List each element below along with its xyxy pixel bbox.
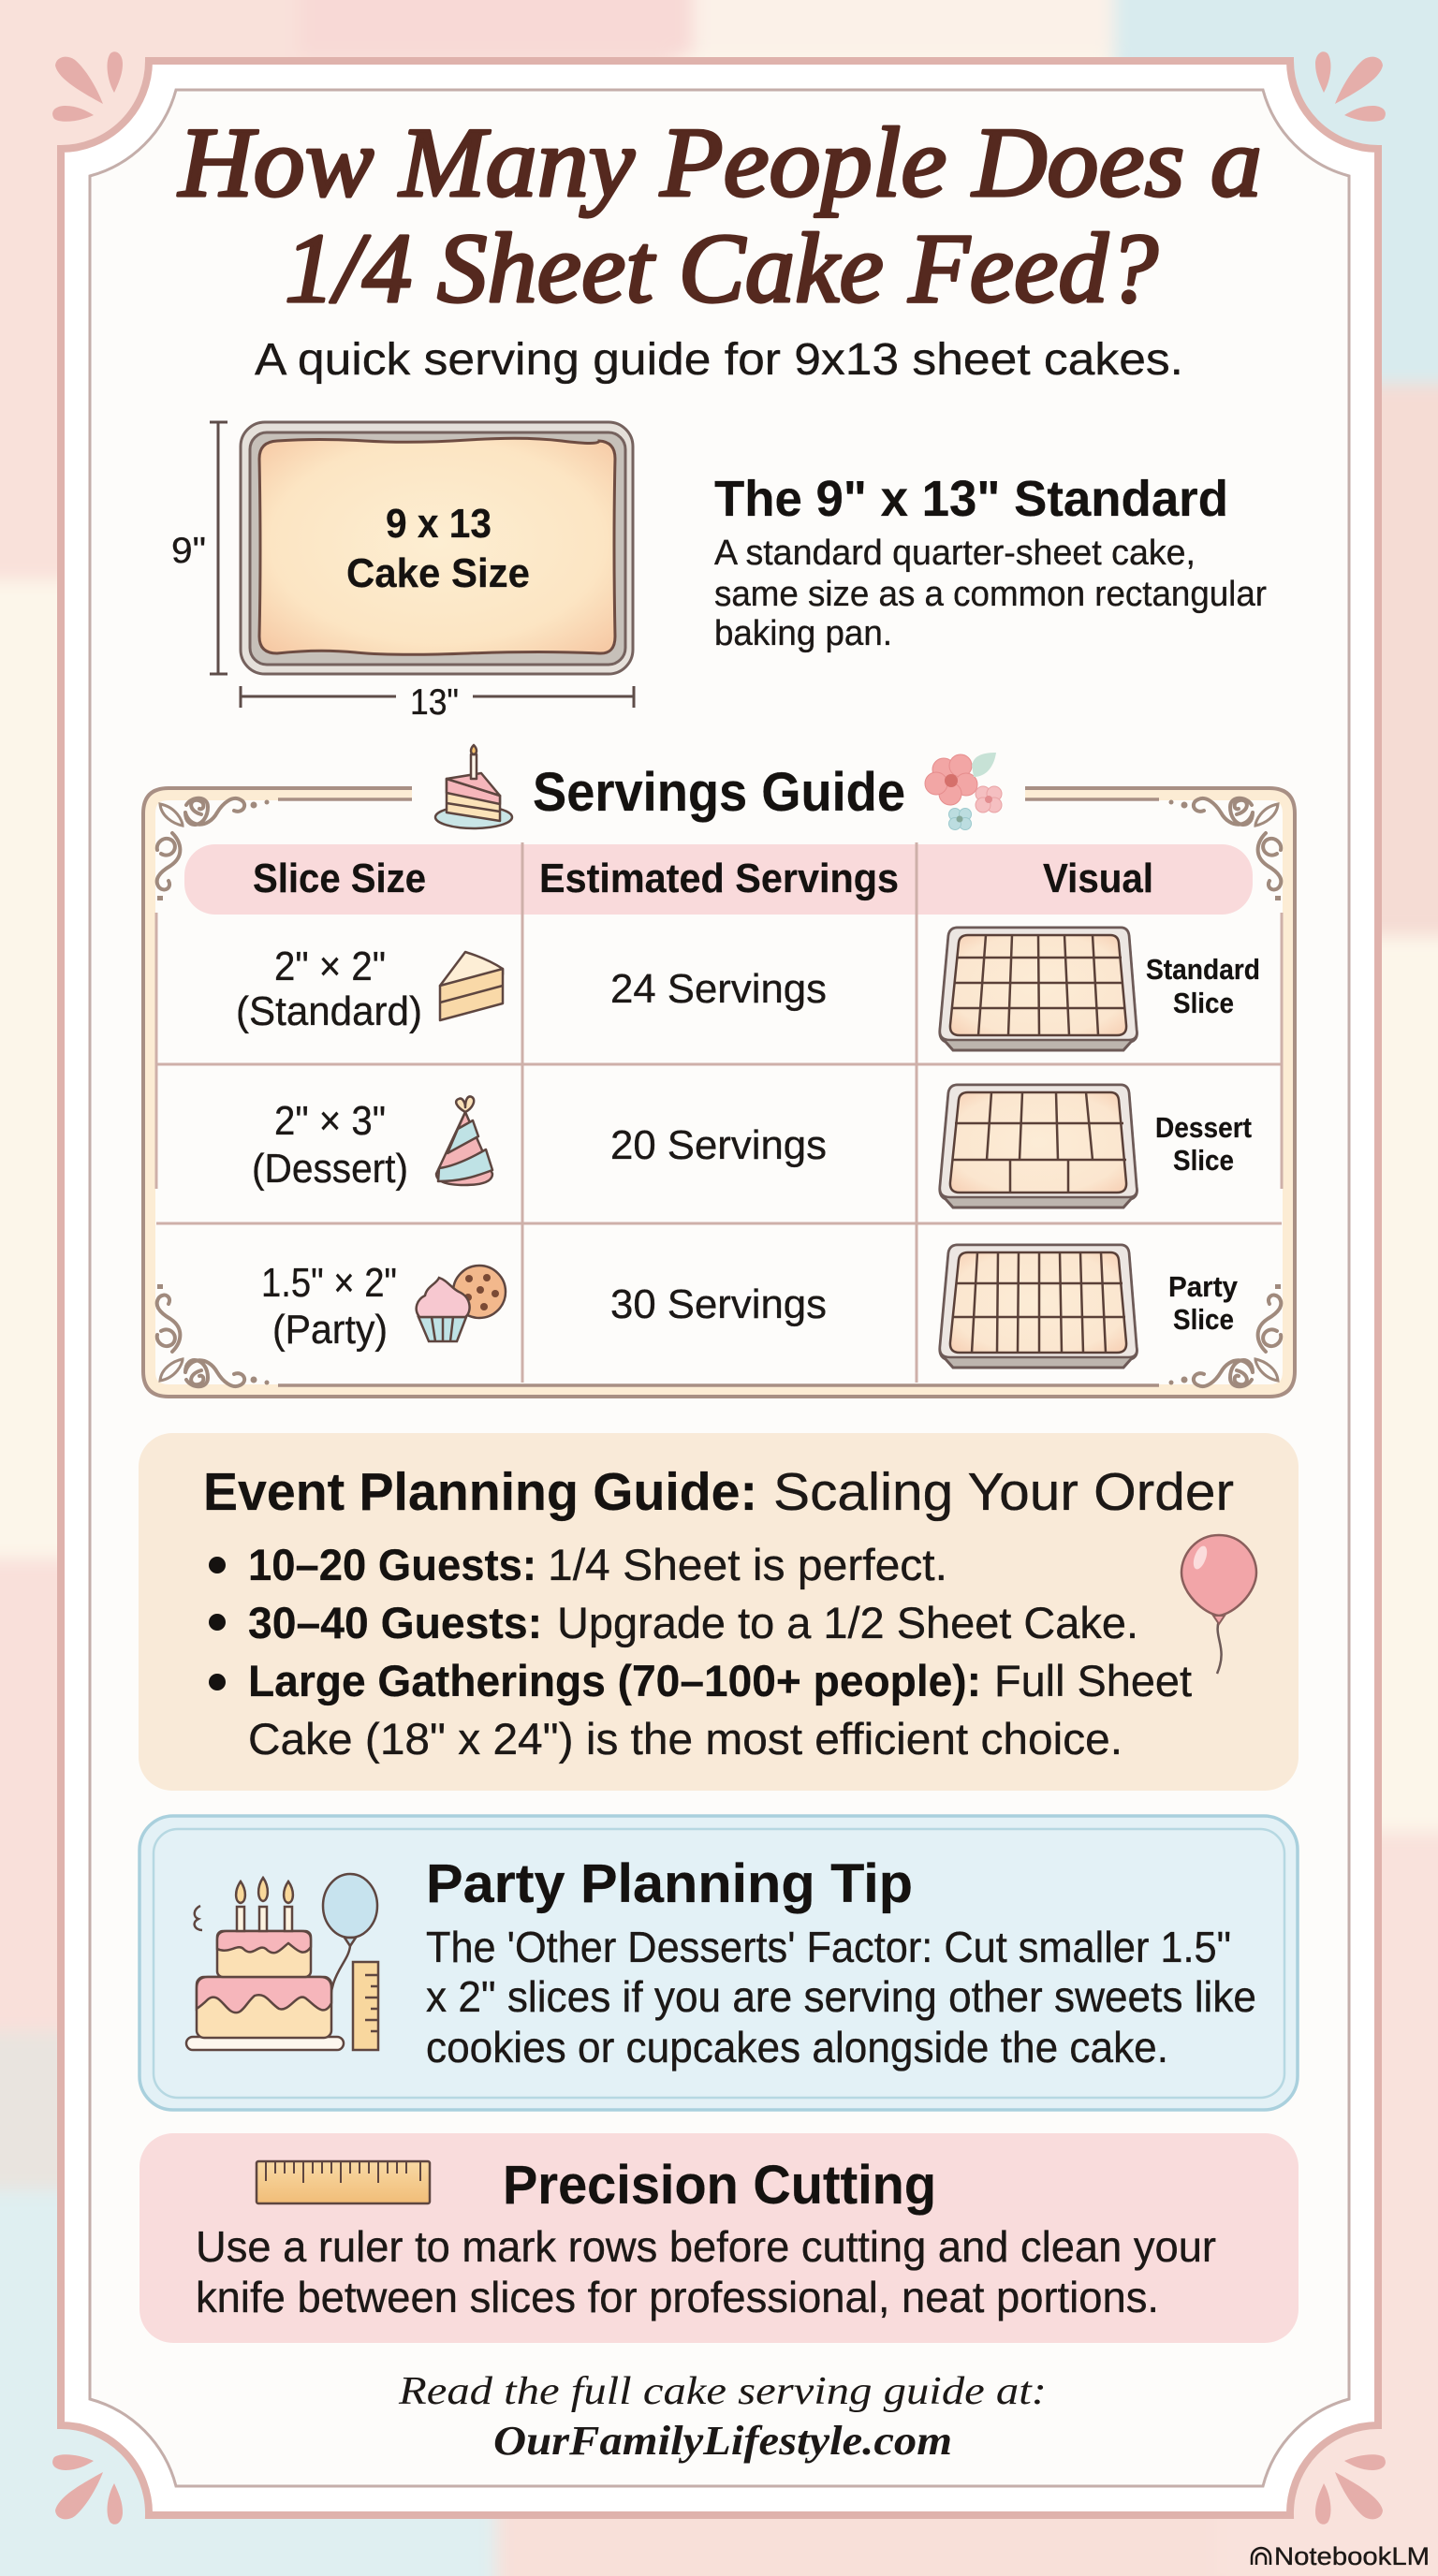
panel: servings guide (143, 745, 1295, 1397)
body text (196, 2222, 1216, 2321)
icon: pink balloon (1181, 1535, 1256, 1674)
body text: The 'Other Desserts' Factor: Cut smaller 1.5" (426, 1923, 1231, 1971)
table grid (156, 842, 1282, 1383)
icon: flowers (925, 753, 1002, 829)
title: How Many People Does a (177, 108, 1262, 217)
slice size: (Dessert) (252, 1146, 408, 1192)
title: 1/4 Sheet Cake Feed? (285, 213, 1158, 323)
table header labels (253, 856, 1153, 901)
bullet list: Cake (18" x 24") is the most efficient choice. (248, 1714, 1123, 1764)
standard description: The 9" x 13" Standard (714, 471, 1228, 527)
row: standard slice (236, 928, 1260, 1050)
standard description: A standard quarter-sheet cake, (714, 534, 1196, 573)
icon: cake slice on plate (435, 745, 512, 828)
servings: 30 Servings (610, 1281, 827, 1327)
slice size (236, 944, 422, 1034)
heading: Servings Guide (533, 762, 905, 823)
footer call to action: Read the full cake serving guide at: (398, 2370, 1047, 2413)
slice size: (Standard) (236, 988, 422, 1034)
slice size: 1.5" × 2" (261, 1260, 397, 1306)
slice size (252, 1098, 408, 1192)
slice size: (Party) (272, 1307, 388, 1353)
pan label (346, 501, 530, 596)
bullet list: Upgrade to a 1/2 Sheet Cake. (557, 1598, 1138, 1647)
heading: Party Planning Tip (426, 1853, 913, 1914)
panel: precision cutting (139, 2133, 1299, 2343)
slice size: 2" × 2" (274, 944, 386, 989)
visual label: Slice (1173, 1303, 1234, 1336)
subtitle: A quick serving guide for 9x13 sheet cakes. (255, 335, 1183, 385)
icon: ruler (257, 2161, 430, 2203)
heading: Scaling Your Order (773, 1462, 1234, 1522)
body text: knife between slices for professional, neat portions. (196, 2273, 1159, 2321)
visual label: Standard (1146, 953, 1260, 986)
visual: 30 slice pan (940, 1245, 1137, 1368)
bullet list: 30–40 Guests: (248, 1598, 542, 1647)
NotebookLM watermark: NotebookLM (1274, 2542, 1430, 2570)
visual label: Party (1168, 1270, 1239, 1303)
heading (203, 1462, 1234, 1522)
icon: birthday cake with balloon and ruler (186, 1874, 378, 2050)
dimension: 9 inch (171, 422, 227, 674)
bullet list (209, 1540, 1192, 1764)
heading: Precision Cutting (503, 2155, 936, 2216)
icon: cake slice (440, 952, 503, 1020)
pan label: Cake Size (346, 550, 530, 596)
heading: Event Planning Guide: (203, 1462, 757, 1522)
visual: 24 slice pan (940, 928, 1137, 1050)
bullet list: 1/4 Sheet is perfect. (548, 1540, 947, 1589)
title (177, 108, 1262, 323)
standard description: baking pan. (714, 614, 892, 653)
dimension: 9 inch: 9" (171, 531, 206, 571)
table header labels: Estimated Servings (539, 856, 899, 901)
dimension: 13 inch: 13" (410, 682, 459, 723)
body text: x 2" slices if you are serving other sweets like (426, 1972, 1256, 2021)
body text: Use a ruler to mark rows before cutting and clean your (196, 2222, 1216, 2271)
slice size: 2" × 3" (274, 1098, 386, 1144)
pan label: 9 x 13 (386, 501, 492, 547)
bullet list: Full Sheet (994, 1656, 1192, 1705)
visual label (1155, 1111, 1252, 1177)
body text: cookies or cupcakes alongside the cake. (426, 2023, 1168, 2071)
visual label: Dessert (1155, 1111, 1252, 1144)
visual label (1146, 953, 1260, 1019)
slice size (261, 1260, 397, 1353)
dimension: 13 inch (241, 682, 634, 723)
body text (426, 1923, 1256, 2071)
table header labels: Slice Size (253, 856, 426, 901)
bullet list: 10–20 Guests: (248, 1540, 536, 1589)
visual label: Slice (1173, 987, 1234, 1019)
panel: event planning guide (139, 1433, 1299, 1791)
icon: baking pan with cake (241, 422, 633, 674)
table header labels: Visual (1043, 856, 1153, 901)
footer call to action (398, 2370, 1047, 2464)
row: dessert slice (252, 1085, 1252, 1208)
servings: 24 Servings (610, 966, 827, 1012)
footer call to action: OurFamilyLifestyle.com (493, 2418, 952, 2464)
bullet list: Large Gatherings (70–100+ people): (248, 1656, 981, 1705)
table ornamental frame (143, 788, 1295, 1397)
visual label (1168, 1270, 1239, 1336)
panel: party planning tip (139, 1816, 1298, 2110)
standard description: same size as a common rectangular (714, 575, 1267, 614)
visual: 20 slice pan (940, 1085, 1137, 1208)
icon: cupcake and cookie (417, 1266, 506, 1341)
table header band (184, 844, 1253, 915)
icon: party hat (436, 1096, 492, 1185)
row: party slice (261, 1245, 1239, 1368)
visual label: Slice (1173, 1144, 1234, 1177)
servings: 20 Servings (610, 1122, 827, 1168)
standard description (714, 471, 1267, 653)
pan size diagram (171, 422, 634, 723)
